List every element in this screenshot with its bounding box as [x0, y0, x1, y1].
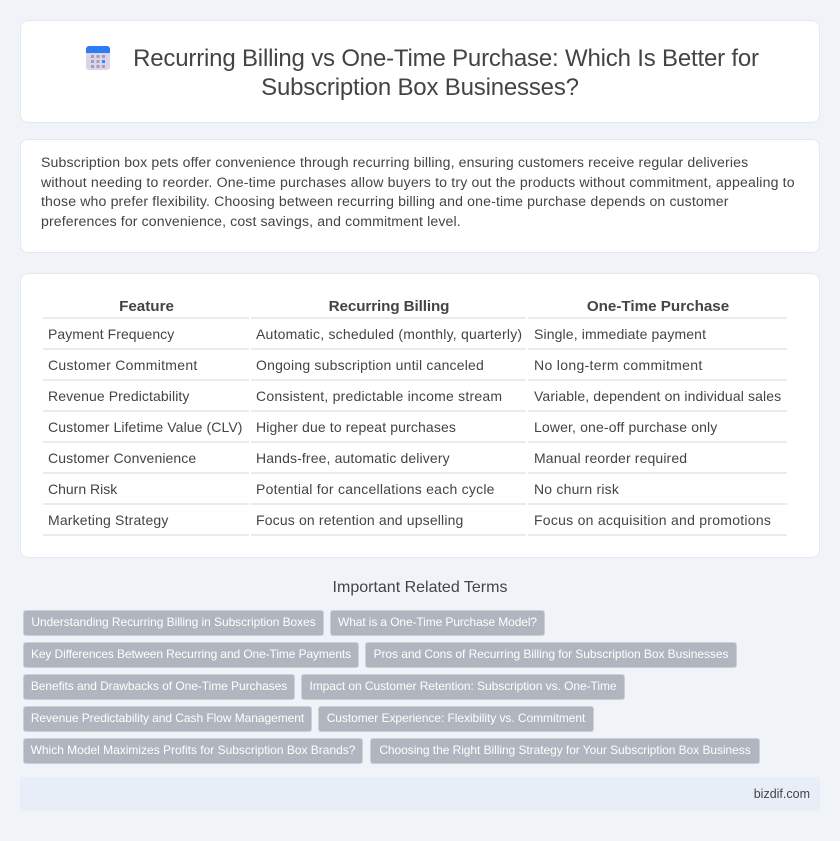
table: comparison: Higher due to repeat purchases [256, 419, 456, 435]
footer: site name: bizdif.com [754, 787, 810, 801]
table: comparison: Marketing Strategy [48, 512, 169, 528]
table: comparison: Ongoing subscription until canceled [256, 357, 484, 373]
tag list: related terms: Revenue Predictability and Cash Flow Management [31, 711, 304, 725]
tag list: related terms: Understanding Recurring Billing in Subscription Boxes [31, 615, 316, 629]
table: comparison: Revenue Predictability [48, 388, 190, 404]
tag list: related terms: Impact on Customer Retention: Subscription vs. One-Time [309, 679, 617, 693]
text block: introduction: without needing to reorder. One-time purchases allow buyers to try out the products without commitment, appealing to [41, 174, 795, 190]
tag list: related terms: Key Differences Between Recurring and One-Time Payments [31, 647, 351, 661]
table: comparison: Hands-free, automatic delivery [256, 450, 450, 466]
title: Subscription Box Businesses? [261, 74, 579, 101]
table: comparison: Focus on retention and upselling [256, 512, 463, 528]
table: comparison: Potential for cancellations each cycle [256, 481, 495, 497]
tag list: related terms: What is a One-Time Purchase Model? [338, 615, 537, 629]
table: comparison: Single, immediate payment [534, 326, 706, 342]
tag list: related terms: Pros and Cons of Recurring Billing for Subscription Box Businesses [374, 647, 728, 661]
tag list: related terms: Which Model Maximizes Profits for Subscription Box Brands? [31, 743, 355, 757]
table: comparison: Automatic, scheduled (monthly, quarterly) [256, 326, 522, 342]
text block: introduction: preferences for convenience, cost savings, and commitment level. [41, 213, 461, 229]
table: comparison: No churn risk [534, 481, 619, 497]
tag list: related terms: Customer Experience: Flexibility vs. Commitment [327, 711, 585, 725]
tag list: related terms: Benefits and Drawbacks of One-Time Purchases [31, 679, 287, 693]
tag list: related terms: Choosing the Right Billing Strategy for Your Subscription Box Business [379, 743, 751, 757]
table: comparison: Manual reorder required [534, 450, 687, 466]
header: Recurring Billing: Recurring Billing [329, 298, 449, 315]
table: comparison: Customer Convenience [48, 450, 196, 466]
title [133, 45, 759, 101]
title: Recurring Billing vs One-Time Purchase: Which Is Better for [133, 45, 759, 72]
footer bar [20, 777, 820, 811]
table: comparison: No long-term commitment [534, 357, 703, 373]
table: comparison: Churn Risk [48, 481, 117, 497]
panel: header [20, 20, 820, 123]
table: comparison: Consistent, predictable income stream [256, 388, 502, 404]
table: comparison: Lower, one-off purchase only [534, 419, 717, 435]
icon: calendar [86, 46, 110, 70]
panel: comparison table [20, 273, 820, 558]
table: comparison: Focus on acquisition and promotions [534, 512, 771, 528]
header: One-Time Purchase: One-Time Purchase [587, 298, 729, 315]
panel: introduction [20, 139, 820, 253]
text block: introduction [41, 154, 795, 229]
tag list: related terms [23, 610, 760, 764]
table: comparison: Customer Commitment [48, 357, 198, 373]
table: comparison: Customer Lifetime Value (CLV) [48, 419, 243, 435]
text block: introduction: those who prefer flexibility. Choosing between recurring billing and one-time purchase depends on customer [41, 193, 729, 209]
table: comparison: Payment Frequency [48, 326, 174, 342]
table: comparison: Variable, dependent on individual sales [534, 388, 781, 404]
text block: introduction: Subscription box pets offer convenience through recurring billing, ensuring customers receive regular deliveries [41, 154, 748, 170]
table: comparison [43, 298, 787, 536]
heading: related terms: Important Related Terms [333, 579, 507, 596]
header: Feature: Feature [119, 298, 174, 315]
